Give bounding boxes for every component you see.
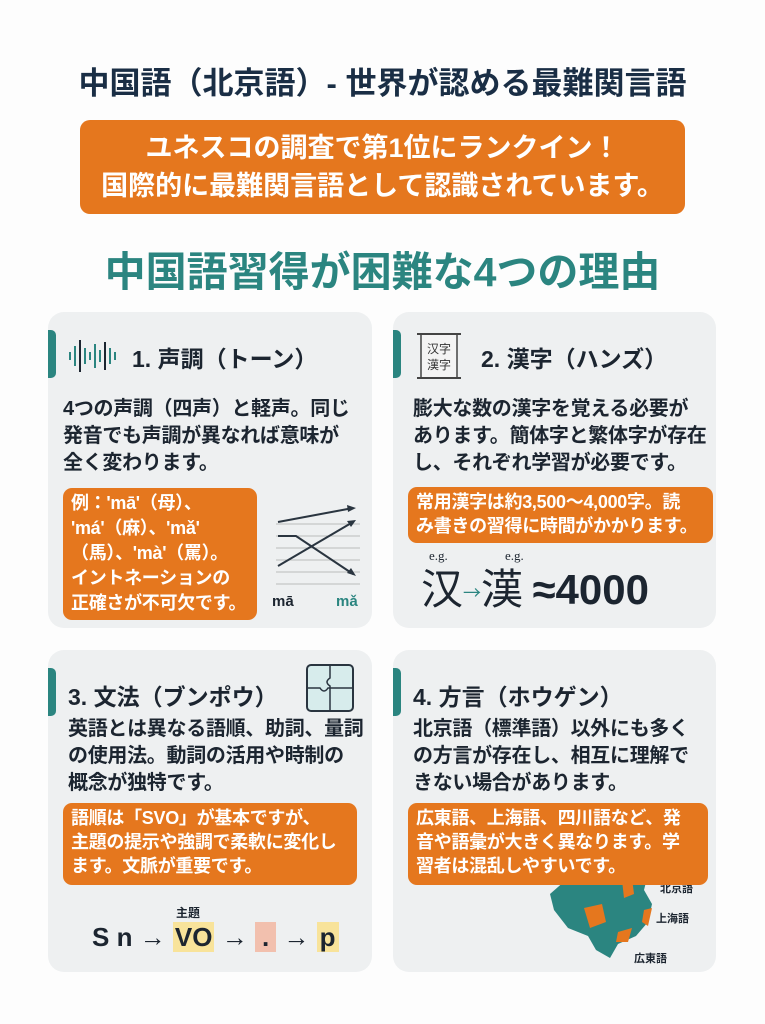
- text block: の方言が存在し、相互に理解で: [413, 745, 689, 767]
- callout: イントネーションの: [71, 568, 230, 588]
- text block: 概念が独特です。: [68, 772, 224, 794]
- chart: tone lines: [272, 505, 360, 610]
- callout: 広東語、上海語、四川語など、発: [416, 808, 681, 828]
- heading: 1. 声調（トーン）: [132, 346, 317, 372]
- panel: tones: [48, 312, 372, 628]
- text block: [413, 398, 706, 474]
- text block: [63, 398, 350, 474]
- banner: 国際的に最難関言語として認識されています。: [101, 171, 664, 201]
- text block: [68, 718, 364, 794]
- text block: [413, 718, 689, 794]
- callout: 'má'（麻）、'mǎ': [71, 518, 200, 538]
- map of China: [550, 880, 693, 966]
- map of China: 上海語: [656, 910, 689, 926]
- text block: 英語とは異なる語順、助詞、量詞: [68, 718, 364, 740]
- icon: scroll: 汉字: [427, 340, 451, 357]
- text block: の使用法。動詞の活用や時制の: [68, 745, 344, 767]
- callout: 正確さが不可欠です。: [71, 593, 246, 613]
- icon: scroll: [417, 333, 461, 379]
- callout: 常用漢字は約3,500〜4,000字。読: [416, 492, 680, 512]
- text block: 4つの声調（四声）と軽声。同じ: [63, 398, 350, 420]
- banner: [80, 120, 685, 214]
- text block: し、それぞれ学習が必要です。: [413, 452, 687, 474]
- callout: [63, 803, 357, 885]
- callout: み書きの習得に時間がかかります。: [416, 516, 697, 536]
- panel: kanji: [393, 312, 716, 628]
- formula: S n → VO → . → p: [92, 922, 336, 952]
- chart: tone lines: mā: [272, 593, 294, 610]
- example: 汉→漢 ≈4000: e.g.: [505, 548, 524, 563]
- heading: 2. 漢字（ハンズ）: [481, 346, 667, 372]
- icon: puzzle: [306, 664, 354, 712]
- text block: あります。簡体字と繁体字が存在: [413, 425, 706, 447]
- banner: ユネスコの調査で第1位にランクイン！: [145, 133, 620, 163]
- title: 中国語（北京語）- 世界が認める最難関言語: [79, 66, 686, 101]
- callout: [408, 803, 708, 885]
- formula: [92, 906, 339, 952]
- callout: [408, 487, 713, 543]
- map of China: 北京語: [660, 880, 693, 896]
- chart: tone lines: mǎ: [336, 593, 358, 610]
- callout: （馬）、'mà'（罵）。: [71, 543, 228, 563]
- text block: きない場合があります。: [413, 772, 628, 794]
- callout: ます。文脈が重要です。: [71, 856, 262, 876]
- callout: [63, 488, 257, 620]
- text block: 膨大な数の漢字を覚える必要が: [413, 398, 688, 420]
- icon: scroll: 漢字: [427, 356, 451, 373]
- icon: sound wave: [69, 340, 116, 372]
- heading: 4. 方言（ホウゲン）: [413, 684, 623, 710]
- panel: dialects: [393, 650, 716, 972]
- panel: grammar: [48, 650, 372, 972]
- text block: 発音でも声調が異なれば意味が: [63, 425, 339, 447]
- text block: 北京語（標準語）以外にも多く: [413, 718, 689, 740]
- heading: 3. 文法（ブンポウ）: [68, 684, 278, 710]
- example: 汉→漢 ≈4000: e.g.: [429, 548, 448, 563]
- example: 汉→漢 ≈4000: 汉→漢 ≈4000: [421, 556, 649, 617]
- callout: 例：'mā'（母）、: [71, 493, 202, 513]
- subtitle: 中国語習得が困難な4つの理由: [105, 249, 660, 295]
- callout: 習者は混乱しやすいです。: [416, 856, 626, 876]
- callout: 音や語彙が大きく異なります。学: [416, 832, 680, 852]
- map of China: 広東語: [634, 950, 667, 966]
- formula: 主題: [176, 906, 200, 920]
- text block: 全く変わります。: [63, 452, 219, 474]
- callout: 主題の提示や強調で柔軟に変化し: [71, 832, 336, 852]
- callout: 語順は「SVO」が基本ですが、: [71, 808, 320, 828]
